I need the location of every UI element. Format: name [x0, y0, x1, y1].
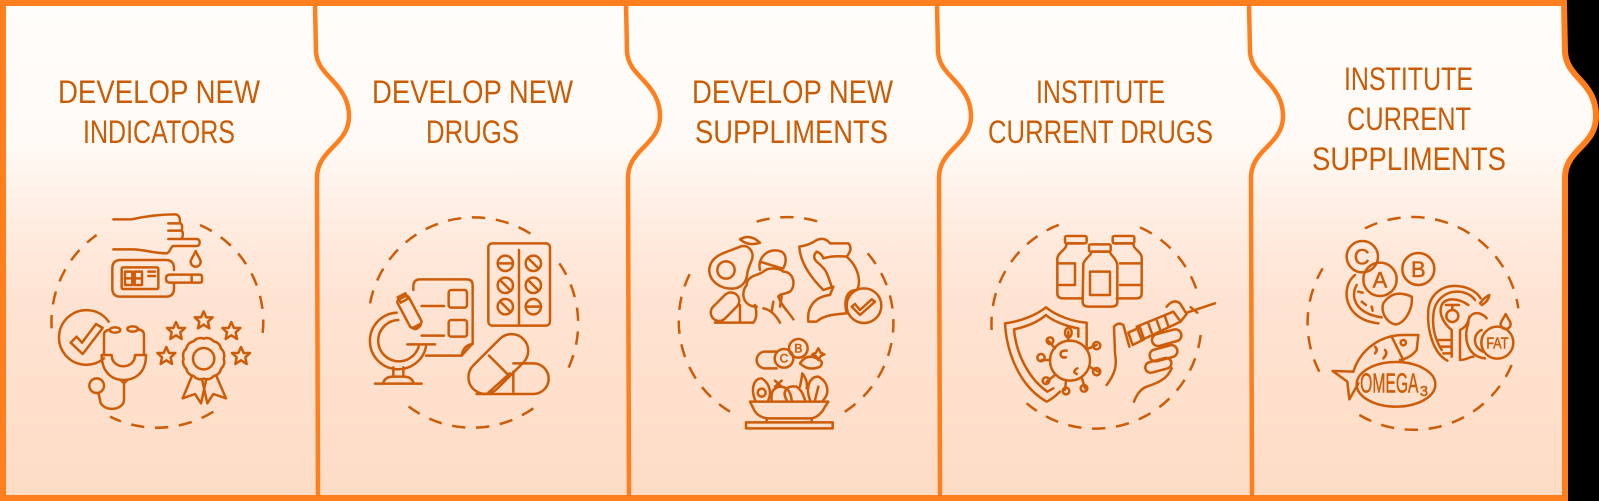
icon: healthy food, stomach, salad: C	[780, 352, 789, 366]
panel: institute current drugs	[988, 74, 1215, 429]
heading: develop new supplements: SUPPLIMENTS	[695, 114, 888, 150]
heading: develop new indicators: INDICATORS	[83, 114, 235, 150]
heading: institute current drugs	[988, 74, 1213, 150]
heading: develop new drugs: DEVELOP NEW	[372, 74, 574, 110]
icon: vitamins, omega-3 fish, salmon and fat: B	[1411, 257, 1426, 282]
icon: healthy food, stomach, salad: B	[794, 342, 802, 356]
icon: vitamins, omega-3 fish, salmon and fat: A	[1373, 267, 1388, 292]
icon: microscope, blister pack, capsules	[370, 217, 578, 428]
panel: develop new drugs	[370, 74, 578, 428]
icon: vitamins, omega-3 fish, salmon and fat	[1308, 217, 1518, 430]
divider 2	[626, 3, 660, 497]
icon: vitamins, omega-3 fish, salmon and fat: 3	[1420, 384, 1428, 400]
icon: vials, shield with virus, syringe	[991, 224, 1215, 429]
icon: vitamins, omega-3 fish, salmon and fat: FAT	[1486, 335, 1509, 352]
divider 3	[937, 3, 971, 497]
divider 1	[315, 3, 349, 497]
icon: healthy food, stomach, salad	[679, 217, 893, 428]
heading: develop new supplements: DEVELOP NEW	[692, 74, 894, 110]
icon: vitamins, omega-3 fish, salmon and fat: OMEGA	[1360, 368, 1419, 399]
heading: develop new drugs: DRUGS	[426, 114, 519, 150]
heading: institute current supplements	[1312, 61, 1506, 177]
heading: develop new drugs	[372, 74, 574, 150]
heading: develop new indicators: DEVELOP NEW	[58, 74, 261, 110]
heading: institute current supplements: SUPPLIMENTS	[1312, 141, 1506, 177]
heading: institute current drugs: INSTITUTE	[1036, 74, 1165, 110]
heading: institute current supplements: CURRENT	[1347, 101, 1471, 137]
icon: glucose meter, stethoscope, award	[51, 214, 263, 428]
divider 4	[1249, 3, 1283, 497]
heading: institute current supplements: INSTITUTE	[1344, 61, 1473, 97]
icon: vitamins, omega-3 fish, salmon and fat: C	[1354, 245, 1370, 270]
heading: develop new indicators	[58, 74, 261, 150]
panel: develop new indicators	[51, 74, 263, 428]
heading: develop new supplements	[692, 74, 894, 150]
panel: institute current supplements	[1308, 61, 1518, 430]
heading: institute current drugs: CURRENT DRUGS	[988, 114, 1213, 150]
panel: develop new supplements	[679, 74, 894, 428]
